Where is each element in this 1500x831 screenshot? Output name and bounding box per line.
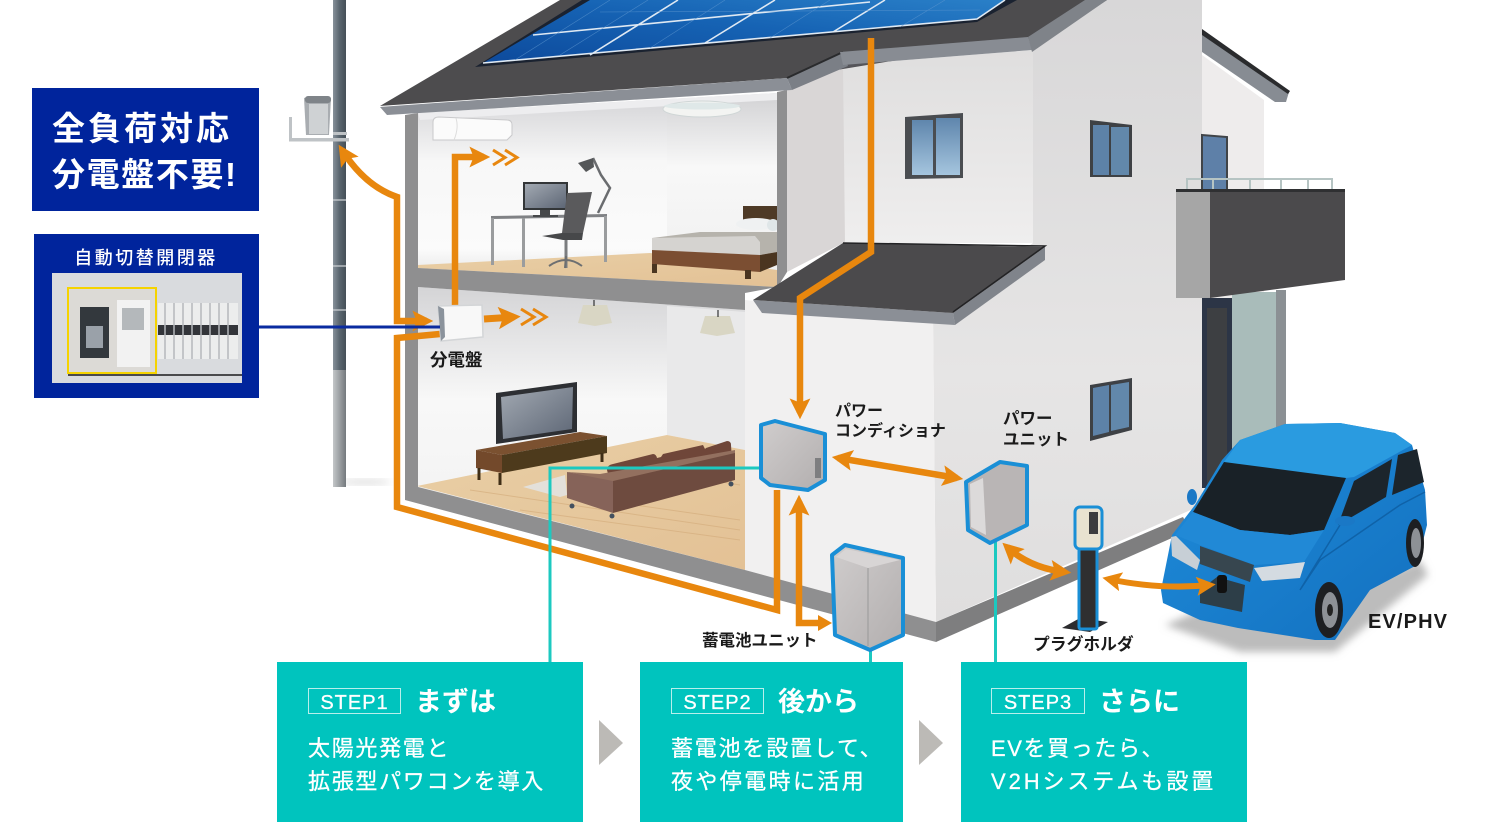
panel: step 1: 太陽光発電と [308, 736, 450, 761]
label: power conditioner: コンディショナ [835, 421, 946, 440]
chevrons: upper [493, 150, 517, 165]
bed [652, 206, 779, 279]
icon: air conditioner [433, 117, 512, 140]
power conditioner [761, 421, 825, 490]
arrow: power unit to plug holder [1007, 547, 1065, 572]
office chair [542, 192, 592, 268]
callout: full-load heading: 分電盤不要! [52, 156, 238, 193]
panel: step 3 [961, 662, 1247, 822]
main roof [380, 0, 1107, 115]
blue connector line [259, 326, 440, 328]
car wheels [1315, 519, 1424, 638]
utility pole [289, 0, 391, 487]
porch roof [753, 243, 1045, 325]
room: lower living room [417, 287, 745, 570]
arrow: grid line to pole [342, 150, 427, 321]
pendant lamps [578, 300, 735, 336]
arrow: step 2 to 3 [919, 720, 943, 765]
desk lamp [578, 158, 610, 213]
line: distribution board to power conditioner [397, 334, 777, 610]
panel: step 1: STEP1 [320, 692, 389, 714]
windows [905, 113, 1132, 441]
panel: step 2 [640, 662, 903, 822]
label: plug holder: プラグホルダ [1033, 634, 1134, 654]
panel: step 1: まずは [415, 687, 496, 717]
right wing and balcony [1176, 29, 1345, 488]
panel: step 3: V2Hシステムも設置 [991, 769, 1216, 794]
label: power unit: パワー [1003, 409, 1052, 428]
arrow: solar to power conditioner [800, 38, 871, 413]
arrow: power conditioner to power unit [838, 458, 957, 478]
television [496, 382, 577, 451]
power unit [966, 462, 1027, 543]
switchboard photo [52, 273, 242, 383]
callout: full-load heading: 全負荷対応 [52, 110, 232, 147]
label: power unit: ユニット [1003, 431, 1069, 449]
teal step connectors [550, 468, 996, 662]
panel: automatic switch [34, 234, 259, 398]
panel: automatic switch: 自動切替開閉器 [74, 248, 218, 268]
arrow: step 1 to 2 [599, 720, 623, 765]
plug holder [1062, 507, 1108, 632]
orange power lines [342, 38, 1065, 623]
rug [523, 475, 567, 497]
house: walls [745, 0, 1264, 622]
battery unit [832, 545, 903, 650]
panel: step 2: 後から [778, 687, 859, 717]
EV car [1161, 423, 1428, 652]
sofa [567, 441, 735, 518]
distribution board [438, 305, 483, 341]
panel: step 2: 蓄電池を設置して、 [671, 736, 883, 761]
label: distribution board: 分電盤 [430, 350, 482, 370]
panel: step 2: 夜や停電時に活用 [671, 769, 866, 794]
panel: step 1: 拡張型パワコンを導入 [308, 769, 545, 794]
panel: step 3: EVを買ったら、 [991, 736, 1165, 761]
label: power conditioner: パワー [835, 402, 883, 420]
callout: full-load heading [32, 88, 259, 211]
panel: step 3: STEP3 [1004, 692, 1072, 714]
label: battery unit: 蓄電池ユニット [702, 631, 818, 650]
arrow: distribution board to lower room [484, 317, 514, 319]
icon: pole transformer [289, 96, 349, 142]
label: EV/PHV: EV/PHV [1368, 611, 1448, 633]
room: upper bedroom [418, 93, 779, 288]
panel: step 2: STEP2 [683, 692, 752, 714]
solar panels [475, 0, 1017, 67]
arrow: battery to power conditioner [799, 501, 822, 623]
arrow: distribution board to upper room [455, 157, 484, 306]
desk with monitor [491, 182, 607, 267]
panel: step 3: さらに [1099, 687, 1180, 717]
icon: ceiling light [663, 101, 741, 117]
house: concrete cut section [405, 90, 1190, 642]
arrow: plug holder to car [1108, 579, 1210, 587]
panel: step 1 [277, 662, 583, 822]
tv stand [476, 432, 607, 485]
